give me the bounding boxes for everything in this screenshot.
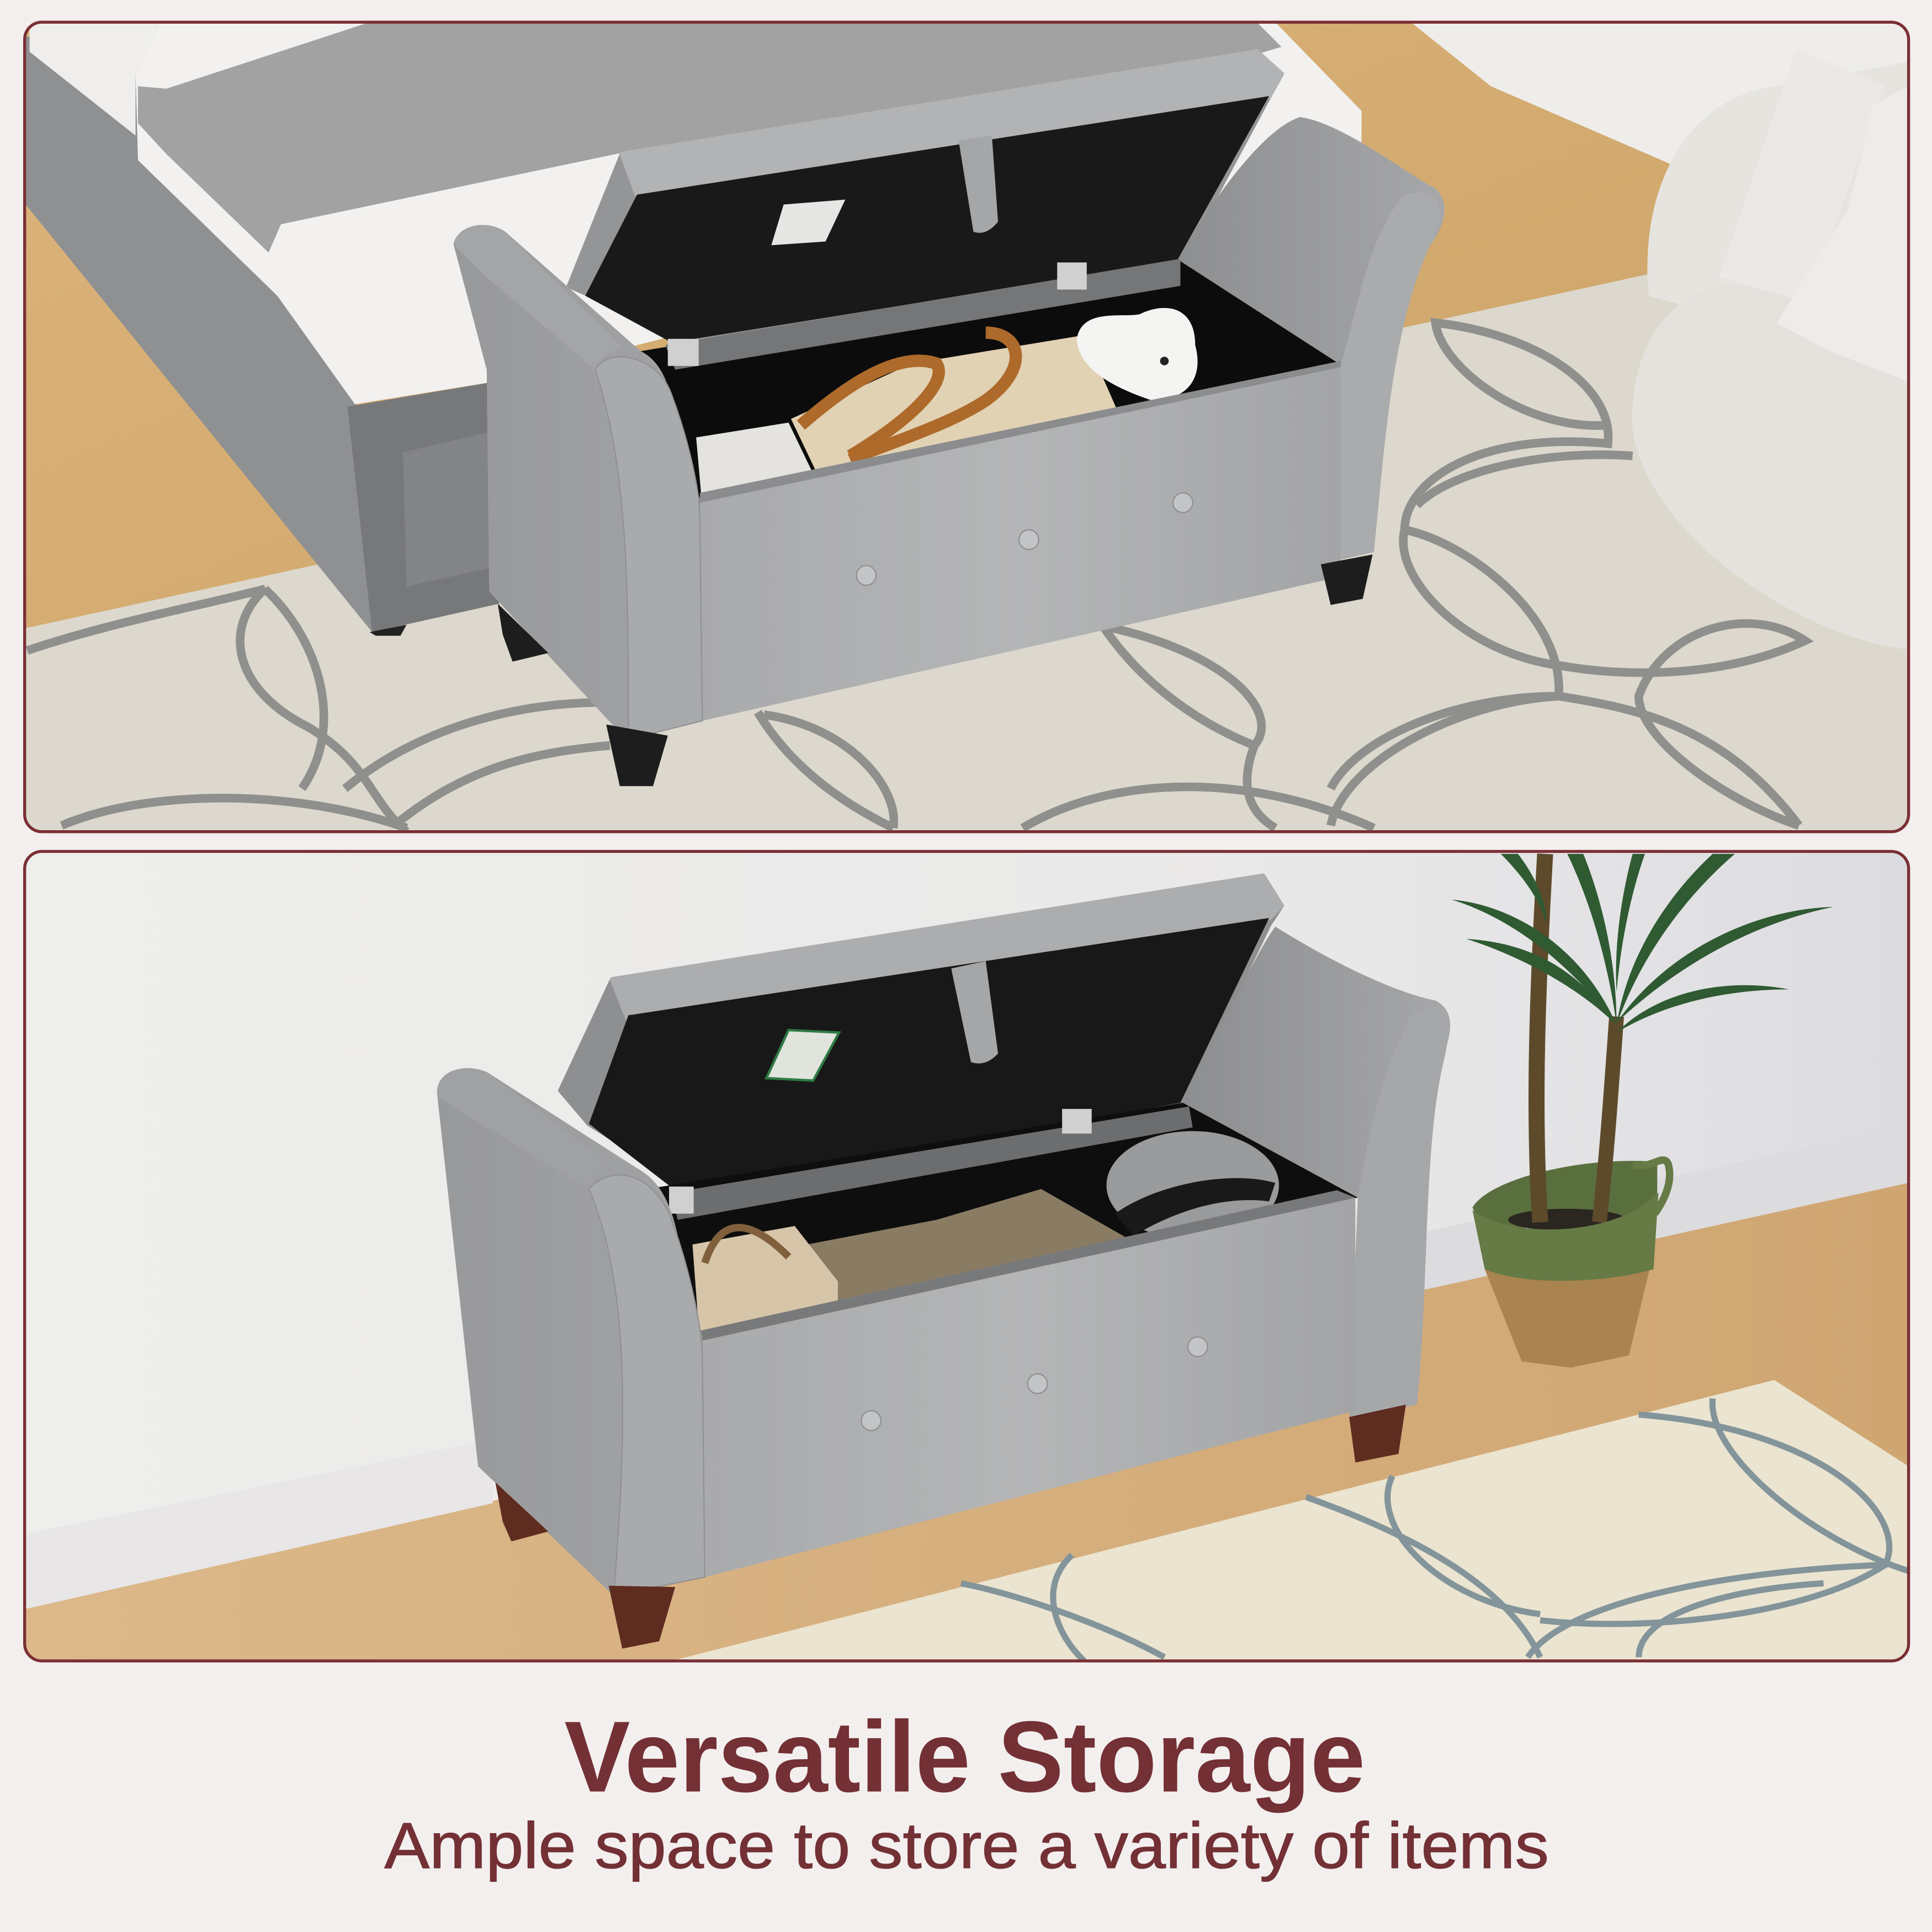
panel: bedroom scene	[25, 22, 1909, 832]
interior	[647, 1103, 1358, 1343]
interior	[641, 261, 1341, 505]
backpack	[807, 1189, 1127, 1318]
title: Versatile Storage	[564, 1700, 1365, 1813]
right arm	[1177, 117, 1445, 564]
wood floor	[26, 23, 1670, 628]
buttons	[861, 1411, 881, 1431]
soil	[1508, 1209, 1626, 1231]
basket lower	[1485, 1263, 1651, 1368]
lid label	[771, 200, 845, 245]
rug	[672, 1380, 1909, 1661]
grey throw blanket	[138, 22, 1281, 253]
teddy	[1077, 308, 1197, 400]
rug	[25, 274, 1909, 832]
basketball	[1106, 1131, 1279, 1240]
front panel	[702, 1198, 1355, 1577]
leaves	[1451, 854, 1833, 1033]
lid	[561, 876, 1281, 1195]
hinges	[668, 339, 699, 366]
left arm	[453, 225, 702, 739]
left arm	[437, 1068, 705, 1596]
lid	[569, 52, 1281, 345]
buttons	[856, 566, 876, 585]
stored items	[696, 423, 819, 508]
storage bench	[453, 52, 1445, 786]
basket upper	[1472, 1193, 1658, 1281]
potted plant	[1451, 854, 1833, 1368]
front panel	[700, 365, 1341, 721]
pillow	[30, 22, 160, 136]
panel border: bottom	[25, 851, 1909, 1661]
baseboards	[25, 1125, 1909, 1609]
curtains	[1411, 22, 1909, 166]
panel: living room scene	[25, 851, 1909, 1661]
legs	[609, 1586, 675, 1649]
subtitle: Ample space to store a variety of items	[384, 1809, 1549, 1882]
legs	[606, 724, 668, 786]
mattress and bedding	[136, 22, 1362, 404]
wall	[25, 851, 1909, 1661]
trunks	[1537, 854, 1545, 1222]
basket back rim and handle	[1472, 1161, 1657, 1232]
bed frame	[25, 22, 499, 636]
wood floor	[25, 1183, 1909, 1661]
round armchair	[1632, 49, 1909, 649]
wooden block	[692, 1226, 838, 1343]
hinges	[669, 1187, 694, 1214]
right arm	[1183, 927, 1450, 1417]
lid label	[766, 1030, 839, 1081]
panel border: top	[25, 22, 1909, 832]
lid strap	[959, 136, 998, 233]
storage bench	[437, 876, 1450, 1649]
lid strap	[951, 961, 998, 1063]
